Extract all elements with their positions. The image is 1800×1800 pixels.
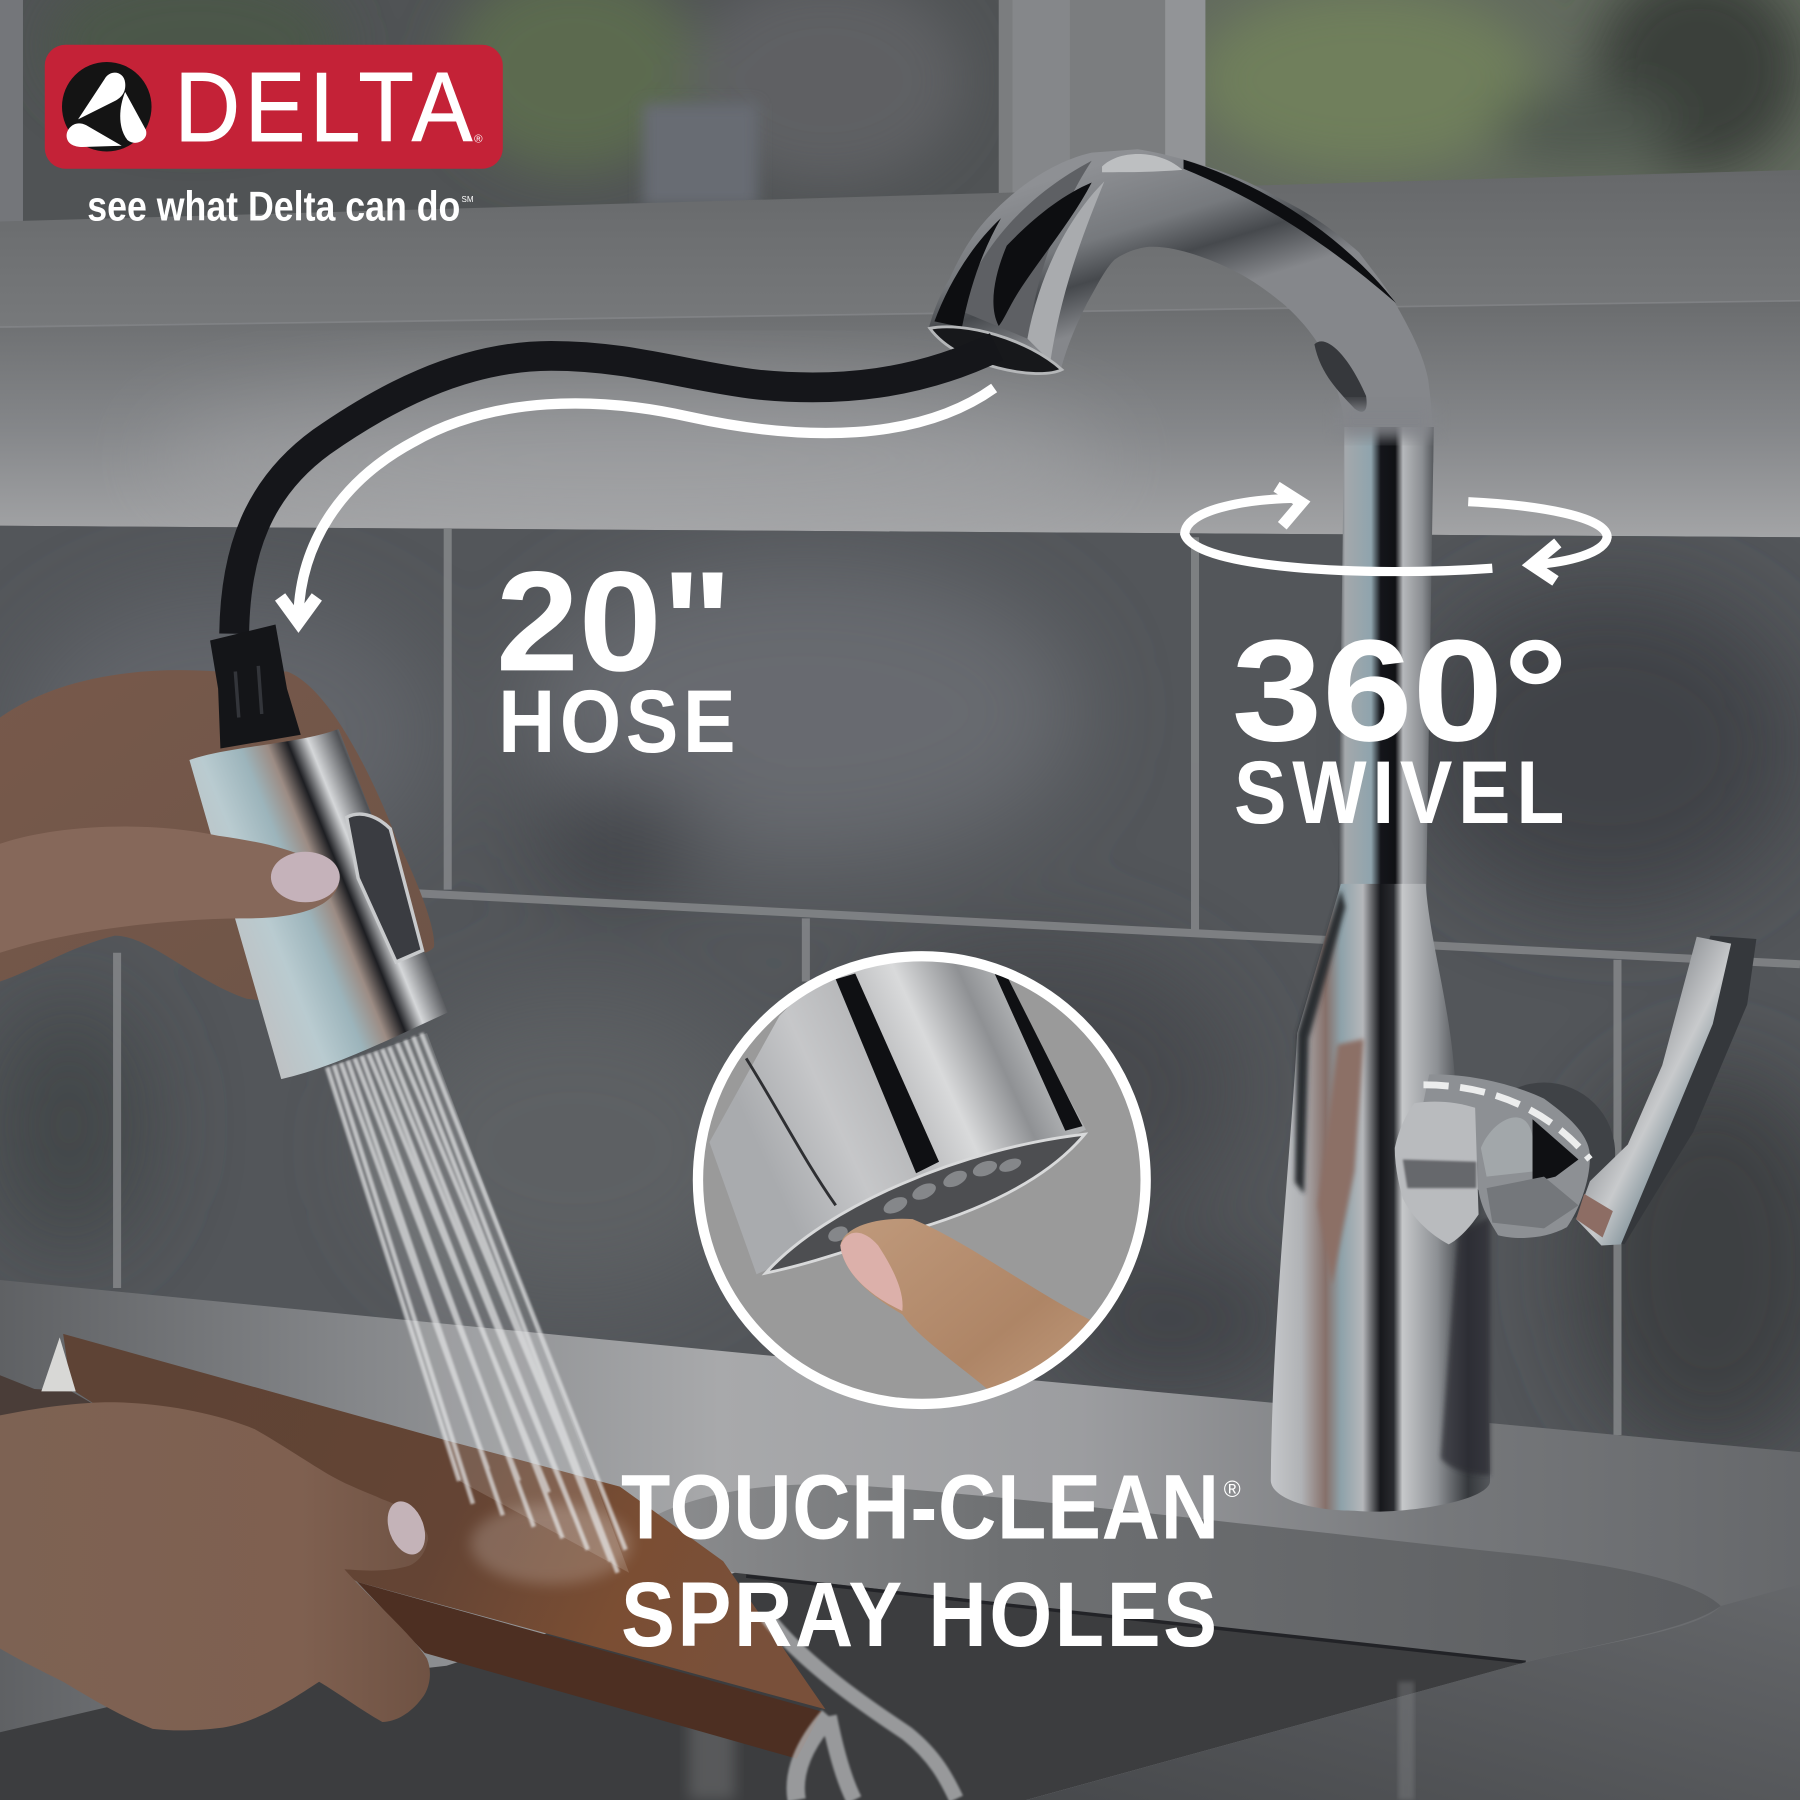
thumb [0, 826, 339, 953]
heading: 360 degree swivel [1232, 609, 1568, 842]
sink crease line [746, 1576, 1526, 1662]
faucet tapered base [1271, 884, 1490, 1512]
spray head [0, 624, 448, 1079]
inset circle: touch-clean close-up [698, 956, 1146, 1423]
spout highlights [1027, 154, 1367, 412]
hose collar [210, 624, 301, 748]
faucet spout arc [929, 149, 1434, 463]
lower hand holding board [0, 1402, 432, 1730]
fingertip [840, 1218, 1090, 1389]
dark object beside board [0, 1375, 103, 1419]
Delta logo [45, 45, 503, 169]
nozzle spray face [766, 1134, 1085, 1273]
faucet lever handle [1576, 936, 1756, 1246]
spout black reflections [934, 160, 1396, 327]
water runoff splash [766, 1615, 956, 1800]
arrow: 360 degree swivel, right [1468, 502, 1607, 581]
heading: touch-clean spray holes [621, 1457, 1241, 1666]
logo emblem [62, 62, 152, 152]
tagline: see what Delta can do [87, 183, 460, 229]
window with blurred trees [0, 0, 1800, 298]
nozzle chrome body [709, 959, 1086, 1274]
window sill [0, 170, 1800, 327]
arrow: hose length [280, 388, 994, 622]
front counter edge [1026, 1584, 1800, 1800]
logo red badge [45, 45, 503, 169]
sink basin floor [0, 1573, 1526, 1800]
thumb nail [271, 852, 340, 902]
hand behind spray head [0, 670, 434, 1010]
spray trigger [347, 814, 422, 962]
arrow: 360 degree swivel, left [1185, 487, 1492, 572]
kitchen faucet [929, 149, 1756, 1512]
heading: 20 inch hose [496, 542, 736, 771]
heading: touch-clean spray holes: SPRAY HOLES [621, 1564, 1217, 1666]
lower hand nail [381, 1496, 432, 1560]
logo registered mark: ® [474, 133, 483, 145]
nozzle dark reflection stripes [836, 970, 1083, 1173]
heading: touch-clean spray holes: ® [1224, 1476, 1241, 1502]
spout outlet [930, 327, 1062, 374]
board front edge [357, 1582, 822, 1759]
faucet handle hub [1395, 1074, 1615, 1244]
board top surface [63, 1334, 825, 1709]
heading: touch-clean spray holes: TOUCH-CLEAN [621, 1457, 1219, 1558]
spray holes [826, 1156, 1023, 1245]
sink basin back wall [620, 1484, 1721, 1662]
tagline: SM [461, 195, 474, 204]
pull-down hose [234, 347, 996, 634]
fingernail [840, 1233, 903, 1311]
heading: 20 inch hose: 20" [496, 542, 732, 701]
logo wordmark: DELTA [174, 53, 473, 163]
countertop [0, 1280, 1800, 1800]
spout chrome left shoulder [959, 161, 1092, 339]
tile grout lines [117, 528, 1800, 1435]
cutting board [0, 1334, 825, 1759]
chrome head body [189, 729, 448, 1079]
heading: 360 degree swivel: 360° [1232, 609, 1568, 771]
heading: 20 inch hose: HOSE [498, 671, 736, 771]
water spray [327, 1033, 631, 1584]
white knife tip [41, 1337, 76, 1391]
marble tile wall [0, 526, 1800, 1458]
faucet stem [1337, 427, 1434, 918]
wall panel [0, 301, 1800, 537]
heading: 360 degree swivel: SWIVEL [1234, 742, 1564, 842]
